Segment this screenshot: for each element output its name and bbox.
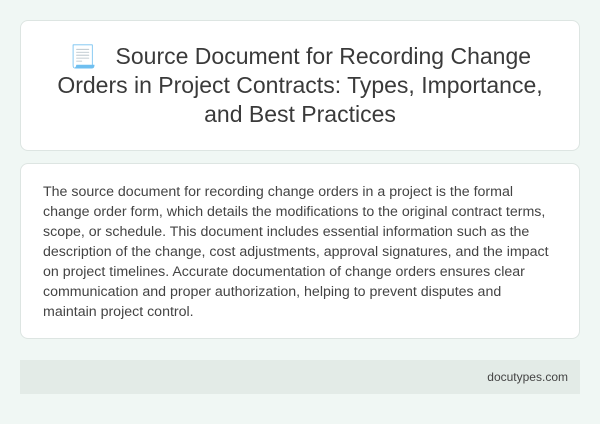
title: 📃 Source Document for Recording Change Orders in Project Contracts: Types, Importance, and Best Practices	[57, 43, 543, 127]
footer	[20, 360, 580, 394]
description text: The source document for recording change orders in a project is the formal change order form, which details the modifications to the original contract terms, scope, or schedule. This document includes essential information such as the description of the change, cost adjustments, approval signatures, and the impact on project timelines. Accurate documentation of change orders ensures clear communication and proper authorization, helping to prevent disputes and maintain project control.	[43, 184, 549, 320]
title card	[20, 20, 580, 151]
description card	[20, 163, 580, 339]
footer: docutypes.com	[487, 370, 568, 384]
